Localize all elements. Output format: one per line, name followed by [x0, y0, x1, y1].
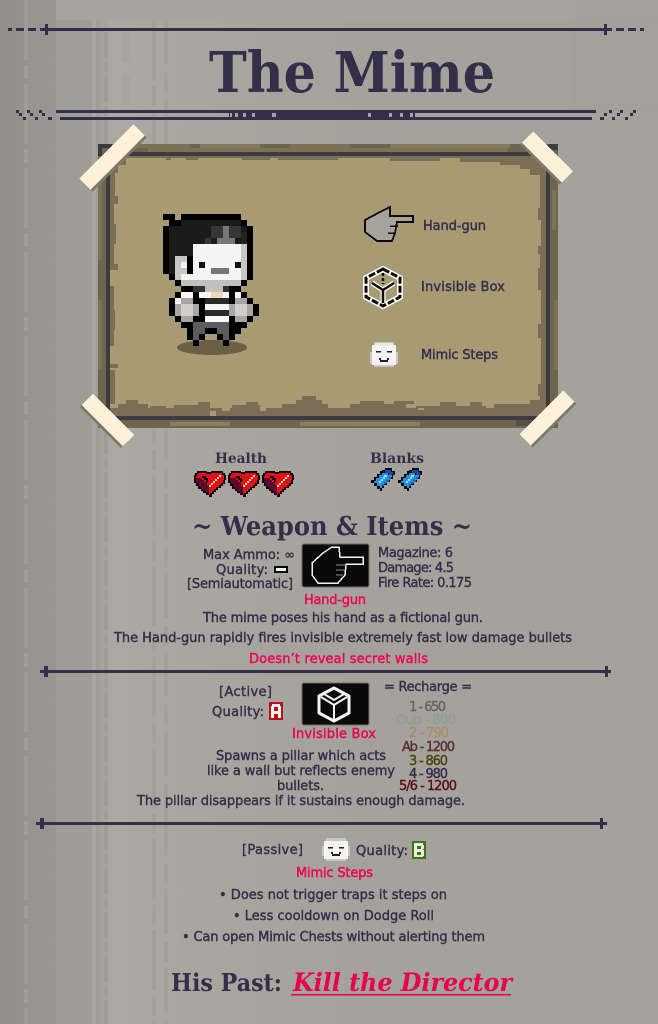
- divider two: [36, 818, 607, 829]
- passive bullet list: • Less cooldown on Dodge Roll: [233, 909, 434, 924]
- active item description: bullets.: [277, 779, 324, 794]
- health hearts: [194, 471, 294, 497]
- active item description: like a wall but reflects enemy: [207, 764, 395, 779]
- passive bullet list: • Can open Mimic Chests without alerting them: [182, 930, 485, 945]
- blanks icons: [371, 468, 422, 491]
- panel: character parchment: [98, 144, 558, 428]
- recharge table: Oub - 800: [396, 713, 456, 728]
- icon: invisible box: [366, 269, 400, 306]
- title: The Mime: [209, 40, 495, 106]
- icon: hand-gun box: [302, 544, 369, 587]
- weapon stats right: [378, 546, 472, 591]
- icon: hand-gun: [365, 207, 413, 241]
- tape: top left: [79, 124, 147, 192]
- icon: invisible box tile: [302, 683, 369, 725]
- passive item header: [242, 838, 426, 861]
- tape: bottom right: [519, 390, 577, 448]
- passive bullet list: [182, 888, 485, 945]
- item name: invisible box: Invisible Box: [292, 727, 376, 742]
- tape: top right: [520, 132, 573, 184]
- icon: mimic steps face: [370, 342, 398, 367]
- weapon description: The Hand-gun rapidly fires invisible extremely fast low damage bullets: [113, 631, 572, 646]
- weapon stats left: Max Ammo: ∞: [203, 548, 295, 563]
- weapon description: [113, 611, 572, 646]
- divider one: [40, 666, 611, 677]
- recharge table: 3 - 860: [409, 754, 448, 769]
- weapon note: Doesn’t reveal secret walls: [249, 652, 428, 667]
- active item info: [212, 685, 283, 720]
- label: invisible box: Invisible Box: [421, 280, 505, 295]
- recharge table: 4 - 980: [409, 767, 448, 782]
- weapon stats left: Quality:: [216, 563, 268, 578]
- weapon stats right: Magazine: 6: [378, 546, 453, 561]
- character: the mime: [163, 214, 259, 355]
- passive item header: [Passive]: [242, 843, 303, 858]
- weapon stats right: Fire Rate: 0.175: [378, 576, 472, 591]
- recharge table: 2 - 790: [409, 726, 449, 741]
- active item info: Quality:: [212, 705, 264, 720]
- label: hand-gun: Hand-gun: [423, 219, 486, 234]
- item name: mimic steps: Mimic Steps: [296, 866, 373, 881]
- footer: his past: [171, 968, 514, 997]
- active item description: The pillar disappears if it sustains enough damage.: [136, 794, 465, 809]
- recharge table: Ab - 1200: [402, 740, 455, 755]
- footer: his past: His Past:: [171, 968, 282, 997]
- passive bullet list: • Does not trigger traps it steps on: [219, 888, 447, 903]
- recharge table: 1 - 650: [409, 700, 446, 715]
- label: mimic steps: Mimic Steps: [421, 348, 498, 363]
- active item description: [136, 749, 465, 809]
- passive item header: Quality:: [356, 844, 408, 859]
- active item description: Spawns a pillar which acts: [216, 749, 386, 764]
- weapon stats left: [Semiautomatic]: [187, 577, 293, 592]
- heading: weapon and items: ~ Weapon & Items ~: [192, 512, 472, 542]
- weapon stats right: Damage: 4.5: [378, 561, 454, 576]
- weapon description: The mime poses his hand as a fictional gun.: [202, 611, 483, 626]
- heading: health: Health: [215, 451, 267, 467]
- recharge table: = Recharge =: [384, 680, 472, 695]
- recharge table: 5/6 - 1200: [399, 779, 457, 794]
- footer: his past: Kill the Director: [292, 968, 514, 997]
- title underline ornament: [16, 110, 636, 120]
- recharge table: [384, 680, 472, 794]
- weapon name: Hand-gun: [304, 593, 366, 608]
- heading: blanks: Blanks: [370, 451, 424, 467]
- weapon stats left: [187, 548, 295, 592]
- active item info: [Active]: [219, 685, 272, 700]
- tape: bottom left: [80, 394, 134, 448]
- top ornament divider: [8, 24, 644, 35]
